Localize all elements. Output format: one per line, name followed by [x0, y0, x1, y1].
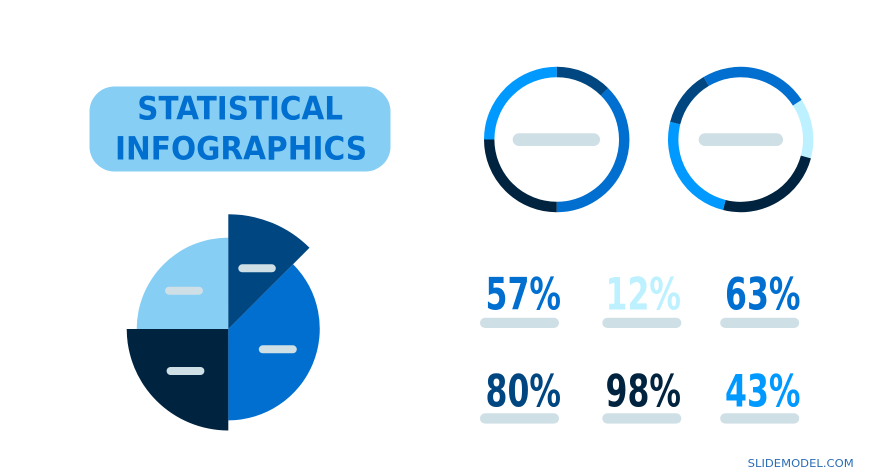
pie slice: blue	[228, 264, 320, 420]
pie slice: navy	[127, 329, 228, 430]
donut segment: blue	[557, 92, 624, 207]
title line one: STATISTICAL	[137, 89, 343, 127]
donut segment: blue	[706, 72, 797, 103]
label bar	[480, 413, 559, 424]
donut segment: dark blue	[557, 72, 604, 92]
donut chart right	[673, 72, 808, 207]
brand wordmark: SLIDEMODEL.COM	[748, 457, 854, 470]
label bar	[602, 318, 681, 328]
donut segment: pale blue	[797, 103, 808, 157]
title panel	[90, 86, 390, 172]
donut segment: dark blue	[675, 81, 706, 123]
label bar	[720, 413, 799, 424]
pie label bar: blue slice	[259, 345, 297, 353]
donut segment: navy	[489, 140, 557, 207]
pie slice: light blue	[137, 238, 228, 329]
title pill background	[90, 86, 390, 172]
donut segment: bright blue	[673, 123, 724, 205]
stat: 57%	[480, 268, 561, 328]
stat: 43%	[720, 366, 800, 424]
donut segment: bright blue	[489, 72, 557, 140]
pie label bar: navy slice	[167, 367, 204, 375]
value: 57%	[486, 268, 561, 320]
stat: 63%	[720, 268, 800, 328]
value: 80%	[486, 366, 561, 418]
value: 43%	[725, 366, 800, 418]
value: 63%	[725, 268, 800, 320]
label bar	[720, 318, 799, 328]
pie slice: dark blue	[228, 214, 310, 329]
stat: 12%	[602, 268, 681, 328]
stat: 80%	[480, 366, 561, 424]
donut segment: navy	[724, 157, 806, 207]
title line two: INFOGRAPHICS	[115, 130, 367, 168]
label bar	[602, 413, 681, 424]
donut centre label bar	[513, 133, 600, 146]
value: 98%	[606, 366, 681, 418]
donut centre label bar	[699, 133, 783, 146]
stat: 98%	[602, 366, 681, 424]
donut chart left	[489, 72, 624, 207]
label bar	[480, 318, 559, 328]
exploded pie chart	[127, 214, 320, 430]
value: 12%	[606, 268, 681, 320]
pie label bar: dark blue slice	[238, 264, 276, 272]
pie label bar: light blue slice	[165, 287, 203, 295]
